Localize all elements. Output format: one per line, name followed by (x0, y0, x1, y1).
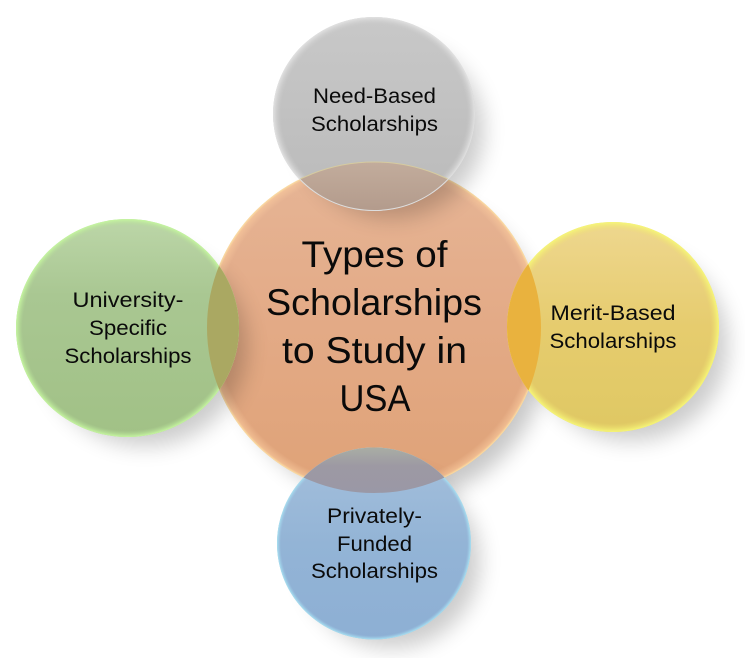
label: university-specific (64, 288, 192, 368)
circle: need-based scholarships (273, 17, 494, 228)
label: university-specific: Specific (89, 316, 167, 340)
title: to Study in (282, 330, 467, 371)
title: Scholarships (266, 282, 482, 323)
label: privately-funded: Scholarships (311, 559, 438, 583)
label: merit-based: Scholarships (550, 329, 676, 353)
circle: privately-funded scholarships (277, 448, 490, 658)
label: merit-based (550, 301, 676, 353)
circle: university-specific scholarships (16, 219, 256, 456)
label: privately-funded (311, 504, 438, 583)
title: USA (340, 378, 411, 419)
title (266, 234, 482, 419)
circle: centre topic (207, 162, 548, 503)
circle: merit-based scholarships (507, 222, 738, 450)
label: privately-funded: Funded (337, 532, 412, 556)
label: university-specific: Scholarships (64, 344, 192, 368)
label: need-based (311, 84, 438, 136)
label: merit-based: Merit-Based (550, 301, 676, 325)
label: need-based: Need-Based (313, 84, 436, 108)
label: need-based: Scholarships (311, 112, 438, 136)
label: privately-funded: Privately- (327, 504, 422, 528)
title: Types of (302, 234, 448, 275)
label: university-specific: University- (72, 288, 184, 312)
